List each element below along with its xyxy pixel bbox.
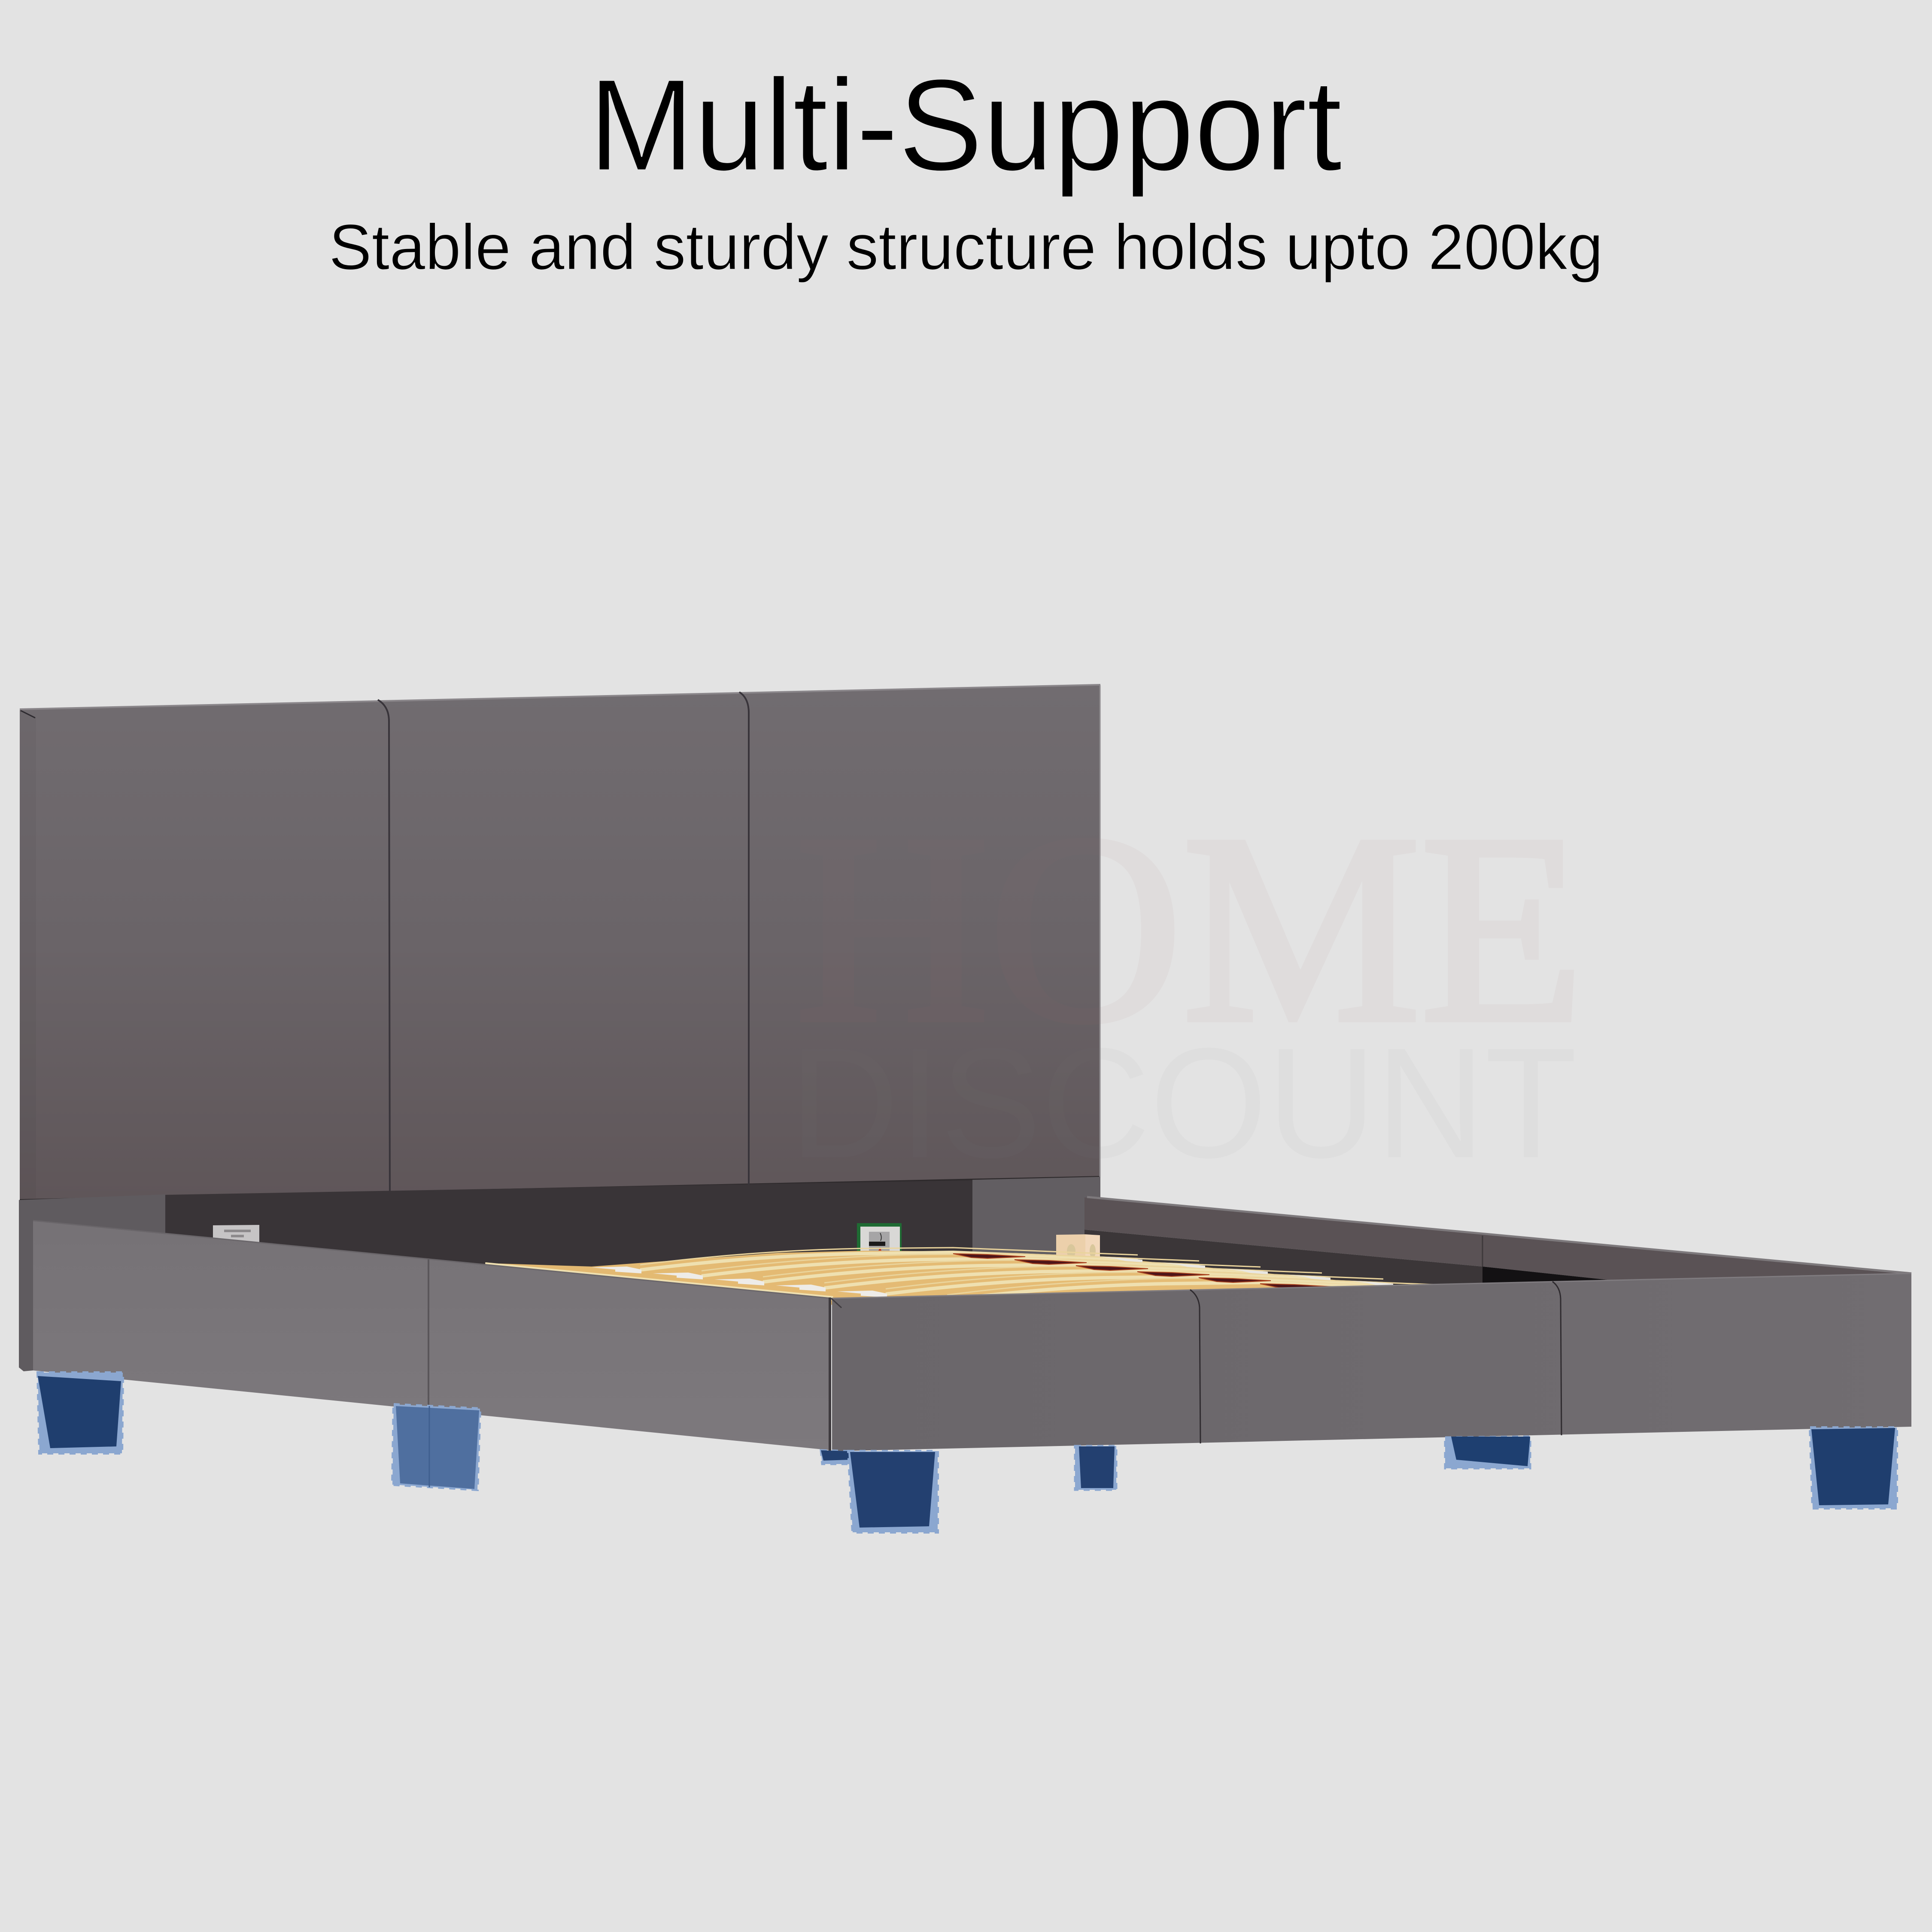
- wood support block: [1056, 1234, 1100, 1258]
- slat 3: [763, 1260, 1261, 1282]
- slat 6: [947, 1278, 1445, 1300]
- watermark: HOME DISCOUNT: DISCOUNT: [790, 1016, 1577, 1191]
- burnt marks: [953, 1254, 1332, 1288]
- leg highlight: side middle: [392, 1404, 480, 1490]
- slat 4: [824, 1266, 1322, 1288]
- foot rail: [830, 1273, 1911, 1451]
- title: Multi-Support: [589, 52, 1343, 198]
- foot rail seam right: [1552, 1282, 1561, 1435]
- far side rail: black gap: [1482, 1267, 1608, 1288]
- back panel: dark fabric: [165, 1180, 972, 1271]
- leg highlight: foot centre: [1075, 1446, 1116, 1490]
- headboard left column: [19, 1194, 165, 1371]
- foot rail seam left: [1190, 1290, 1200, 1443]
- headboard seam right: [739, 692, 749, 1185]
- leg highlight: front corner: [848, 1451, 938, 1532]
- far slat clips: [1098, 1257, 1393, 1286]
- headboard right column: [972, 1177, 1100, 1271]
- green label: [857, 1223, 902, 1253]
- far side rail: inner upper band: [1084, 1197, 1911, 1280]
- slat 5: [886, 1272, 1383, 1294]
- subtitle: Stable and sturdy structure holds upto 200kg: [329, 211, 1603, 283]
- leg highlight: far centre: [1445, 1437, 1530, 1468]
- wooden slats: [485, 1248, 1445, 1305]
- far side rail: inner lower dark panel: [1084, 1230, 1482, 1288]
- leg highlight: foot right: [1810, 1428, 1897, 1508]
- leg highlight: head left: [38, 1373, 123, 1453]
- headboard: [20, 685, 1100, 1200]
- headboard seam left: [378, 700, 390, 1193]
- slat 2: [702, 1254, 1199, 1276]
- side rail: near: [33, 1221, 831, 1450]
- near slat clips: [592, 1267, 887, 1297]
- slat 1: [640, 1248, 1138, 1270]
- care label: white: [213, 1225, 259, 1245]
- watermark: HOME DISCOUNT: HOME: [796, 779, 1584, 1078]
- leg highlight: rear inner leg: [821, 1450, 850, 1464]
